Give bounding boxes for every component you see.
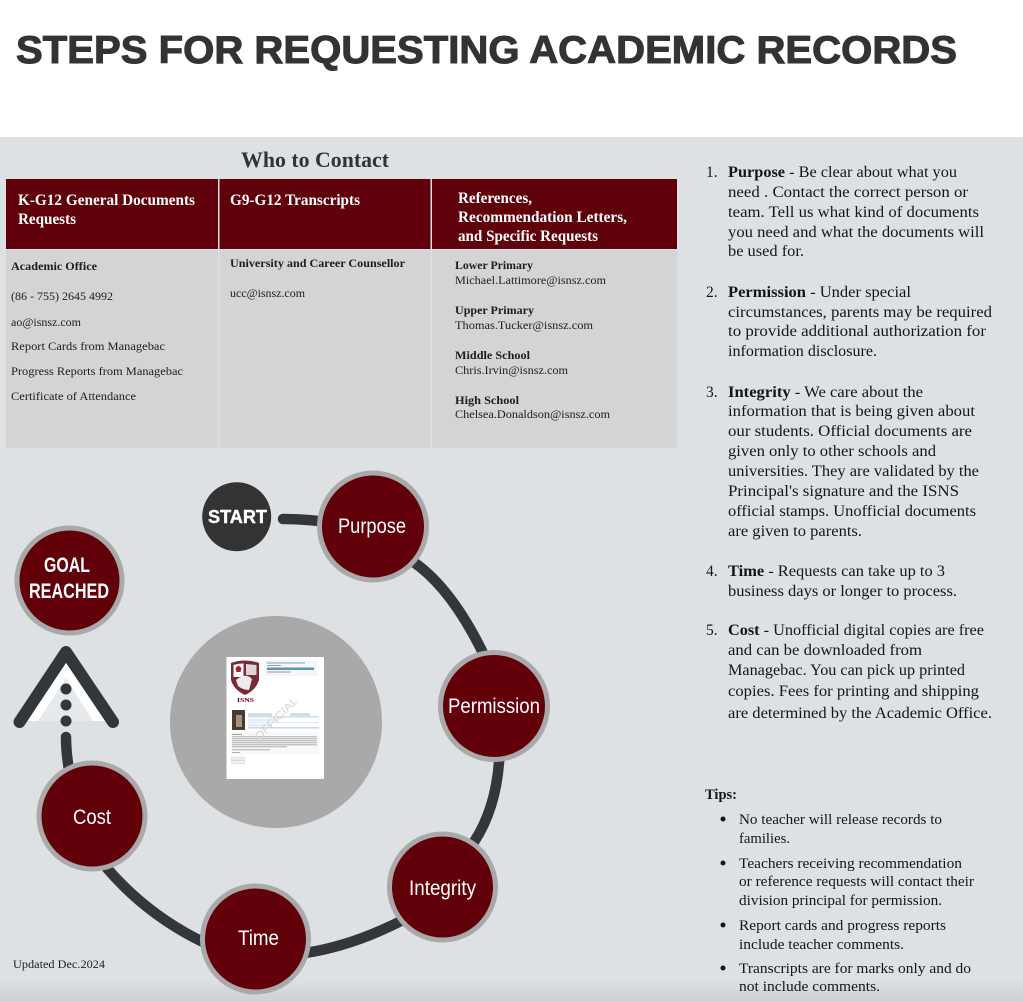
tip 3: Report cards and progress reports bbox=[739, 918, 946, 934]
table column: references: Chris.Irvin@isnsz.com bbox=[455, 363, 569, 377]
goal reached node: GOAL bbox=[44, 554, 90, 577]
table column: general documents bbox=[6, 179, 218, 448]
tip 3 bbox=[720, 918, 946, 953]
contact table bbox=[6, 179, 677, 448]
goal reached node: REACHED bbox=[29, 580, 109, 603]
item 1: purpose: 1. bbox=[706, 164, 718, 181]
table column: general documents: Progress Reports from Managebac bbox=[11, 364, 183, 378]
table column: references: High School bbox=[455, 393, 520, 407]
item 2: permission bbox=[706, 284, 992, 360]
step: cost: Cost bbox=[73, 806, 111, 829]
table column: general documents: Academic Office bbox=[11, 259, 98, 273]
updated note: Updated Dec.2024 bbox=[13, 957, 105, 971]
item 4: time: 4. bbox=[706, 563, 718, 580]
school crest: ISNS bbox=[237, 697, 254, 704]
item 1: purpose bbox=[706, 164, 984, 260]
item 1: purpose: team. Tell us what kind of documents bbox=[728, 204, 979, 221]
document thumbnail bbox=[226, 657, 324, 779]
item 5: cost bbox=[706, 622, 992, 722]
item 2: permission: 2. bbox=[706, 284, 718, 301]
tip 4 bbox=[720, 961, 971, 995]
tip 1 bbox=[720, 812, 942, 847]
table column: references: Lower Primary bbox=[455, 258, 533, 272]
item 3: integrity: our students. Official documents are bbox=[728, 423, 972, 440]
table column: transcripts: University and Career Counsellor bbox=[230, 256, 406, 270]
item 5: cost: 5. bbox=[706, 622, 718, 639]
item 5: cost: Managebac. You can pick up printed bbox=[728, 662, 965, 679]
item 3: integrity: given only to other schools and bbox=[728, 443, 936, 460]
item 2: permission: Permission - Under special bbox=[728, 284, 911, 301]
item 4: time bbox=[706, 563, 957, 600]
item 3: integrity: Principal's signature and the ISNS bbox=[728, 483, 959, 500]
path connecting the steps bbox=[66, 519, 500, 953]
item 3: integrity: information that is being given about bbox=[728, 403, 976, 420]
table column: references: Recommendation Letters, bbox=[458, 209, 627, 226]
tip 1: families. bbox=[739, 831, 790, 847]
item 2: permission: information disclosure. bbox=[728, 343, 877, 360]
table column: references: Chelsea.Donaldson@isnsz.com bbox=[455, 407, 611, 421]
title: STEPS FOR REQUESTING ACADEMIC RECORDS bbox=[16, 29, 957, 72]
table column: transcripts: ucc@isnsz.com bbox=[230, 286, 306, 300]
table column: references: References, bbox=[458, 190, 532, 207]
numbered list of steps bbox=[706, 164, 992, 722]
tip 2 bbox=[720, 856, 974, 909]
item 3: integrity: are given to parents. bbox=[728, 523, 862, 540]
item 2: permission: circumstances, parents may be required bbox=[728, 304, 992, 321]
item 3: integrity: Integrity - We care about the bbox=[728, 384, 923, 401]
table column: references: Thomas.Tucker@isnsz.com bbox=[455, 318, 594, 332]
table column: general documents: K-G12 General Documents bbox=[18, 192, 195, 209]
table column: general documents: (86 - 755) 2645 4992 bbox=[11, 289, 113, 303]
step: purpose bbox=[320, 473, 426, 580]
item 5: cost: Cost - Unofficial digital copies are free bbox=[728, 622, 984, 639]
document thumbnail: OFFICIAL bbox=[253, 695, 301, 743]
table column: references bbox=[432, 179, 677, 448]
table column: transcripts: G9-G12 Transcripts bbox=[230, 192, 360, 209]
tips heading: Tips: bbox=[705, 787, 737, 803]
item 5: cost: copies. Fees for printing and shipping bbox=[728, 683, 979, 700]
start node bbox=[202, 482, 271, 551]
table column: references: and Specific Requests bbox=[458, 228, 598, 245]
step: time: Time bbox=[238, 927, 279, 950]
start node: START bbox=[208, 507, 267, 527]
item 2: permission: to provide additional authorization for bbox=[728, 323, 987, 340]
item 3: integrity: official stamps. Unofficial documents bbox=[728, 503, 976, 520]
tip 2: division principal for permission. bbox=[739, 893, 942, 909]
table column: general documents: ao@isnsz.com bbox=[11, 315, 82, 329]
heading: who to contact: Who to Contact bbox=[241, 147, 390, 172]
item 1: purpose: need . Contact the correct person or bbox=[728, 184, 969, 201]
tip 4: Transcripts are for marks only and do bbox=[739, 961, 971, 977]
table column: general documents: Requests bbox=[18, 211, 76, 228]
goal reached node bbox=[17, 528, 122, 633]
tip 2: or reference requests will contact their bbox=[739, 874, 974, 890]
item 3: integrity bbox=[706, 384, 979, 540]
table column: references: Upper Primary bbox=[455, 303, 534, 317]
item 1: purpose: you need and what the documents will bbox=[728, 224, 984, 241]
tip 1: No teacher will release records to bbox=[739, 812, 942, 828]
step: time bbox=[202, 886, 308, 992]
item 1: purpose: be used for. bbox=[728, 243, 804, 260]
item 1: purpose: Purpose - Be clear about what you bbox=[728, 164, 957, 181]
item 3: integrity: universities. They are validated by the bbox=[728, 463, 979, 480]
table column: general documents: Report Cards from Managebac bbox=[11, 339, 165, 353]
tip 3: include teacher comments. bbox=[739, 937, 904, 953]
step: permission: Permission bbox=[448, 695, 540, 718]
step: purpose: Purpose bbox=[338, 515, 406, 538]
item 5: cost: and can be downloaded from bbox=[728, 642, 922, 659]
item 3: integrity: 3. bbox=[706, 384, 718, 401]
table column: general documents: Certificate of Attendance bbox=[11, 389, 136, 403]
table column: transcripts bbox=[220, 179, 430, 448]
item 5: cost: are determined by the Academic Office. bbox=[728, 705, 992, 722]
center circle with document bbox=[170, 616, 382, 828]
tip 2: Teachers receiving recommendation bbox=[739, 856, 963, 872]
table column: references: Michael.Lattimore@isnsz.com bbox=[455, 273, 607, 287]
step: cost bbox=[39, 763, 145, 869]
step: permission bbox=[440, 652, 548, 760]
item 4: time: business days or longer to process. bbox=[728, 583, 957, 600]
tips section bbox=[705, 787, 974, 995]
table column: references: Middle School bbox=[455, 348, 531, 362]
item 4: time: Time - Requests can take up to 3 bbox=[728, 563, 945, 580]
step: integrity: Integrity bbox=[409, 877, 476, 900]
arrow to goal bbox=[20, 652, 113, 726]
tip 4: not include comments. bbox=[739, 979, 880, 995]
step: integrity bbox=[390, 834, 496, 940]
